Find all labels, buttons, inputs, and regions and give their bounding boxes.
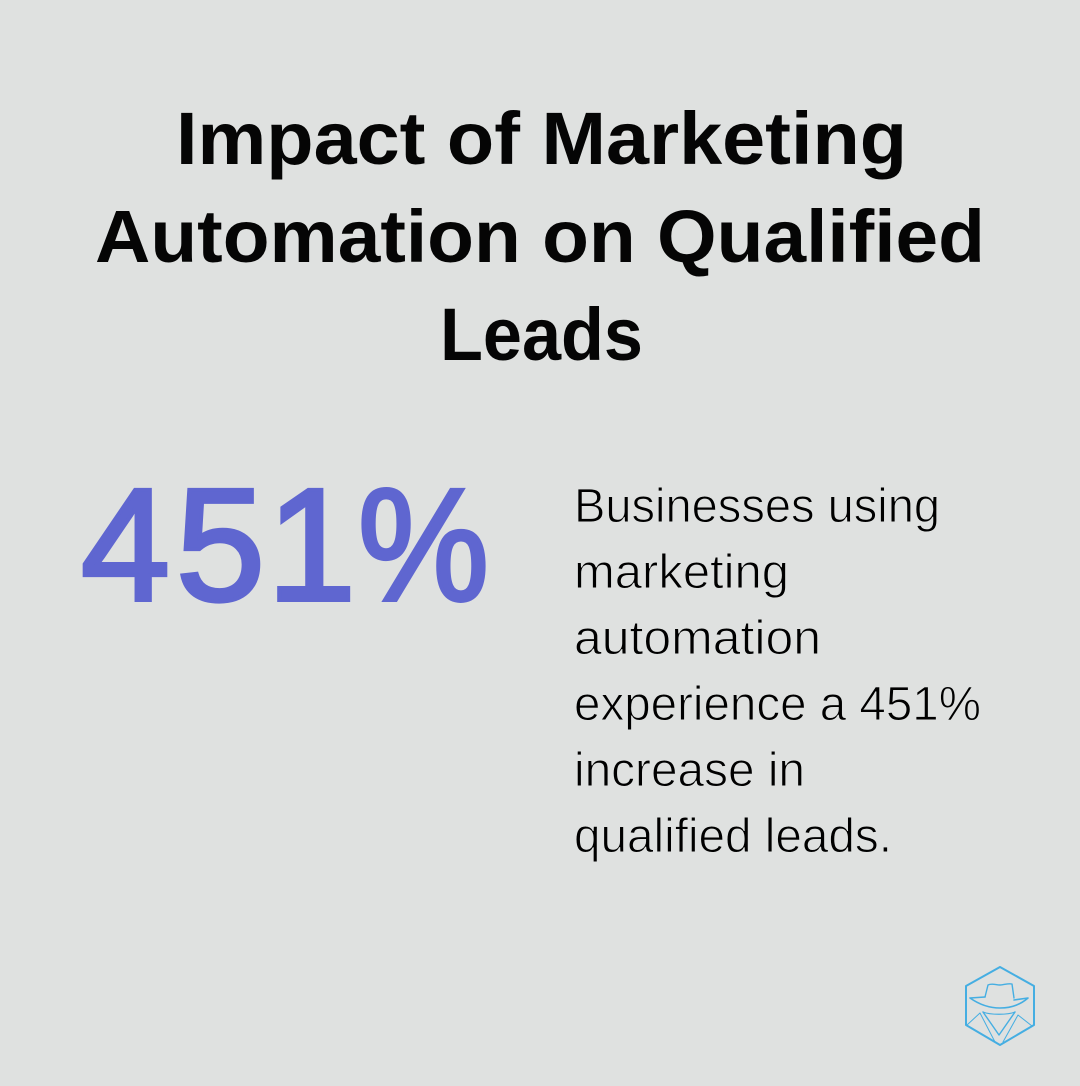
description text: increase in bbox=[574, 744, 805, 797]
big statistic: 451%: 5 bbox=[176, 455, 265, 634]
description text: qualified leads. bbox=[574, 810, 892, 863]
big statistic: 451%: 1 bbox=[267, 455, 356, 634]
title: Automation on Qualified bbox=[95, 195, 985, 278]
description text: automation bbox=[574, 612, 821, 665]
title bbox=[95, 97, 985, 376]
big statistic: 451%: 4 bbox=[81, 455, 170, 634]
icon: spy logo in hexagon bbox=[966, 967, 1034, 1045]
description text: experience a 451% bbox=[574, 678, 981, 731]
description text: marketing bbox=[574, 546, 789, 599]
title: Impact of Marketing bbox=[176, 97, 907, 180]
description text: Businesses using bbox=[574, 480, 940, 533]
title: Leads bbox=[440, 293, 643, 376]
description text bbox=[574, 480, 981, 863]
big statistic: 451%: % bbox=[358, 455, 489, 634]
